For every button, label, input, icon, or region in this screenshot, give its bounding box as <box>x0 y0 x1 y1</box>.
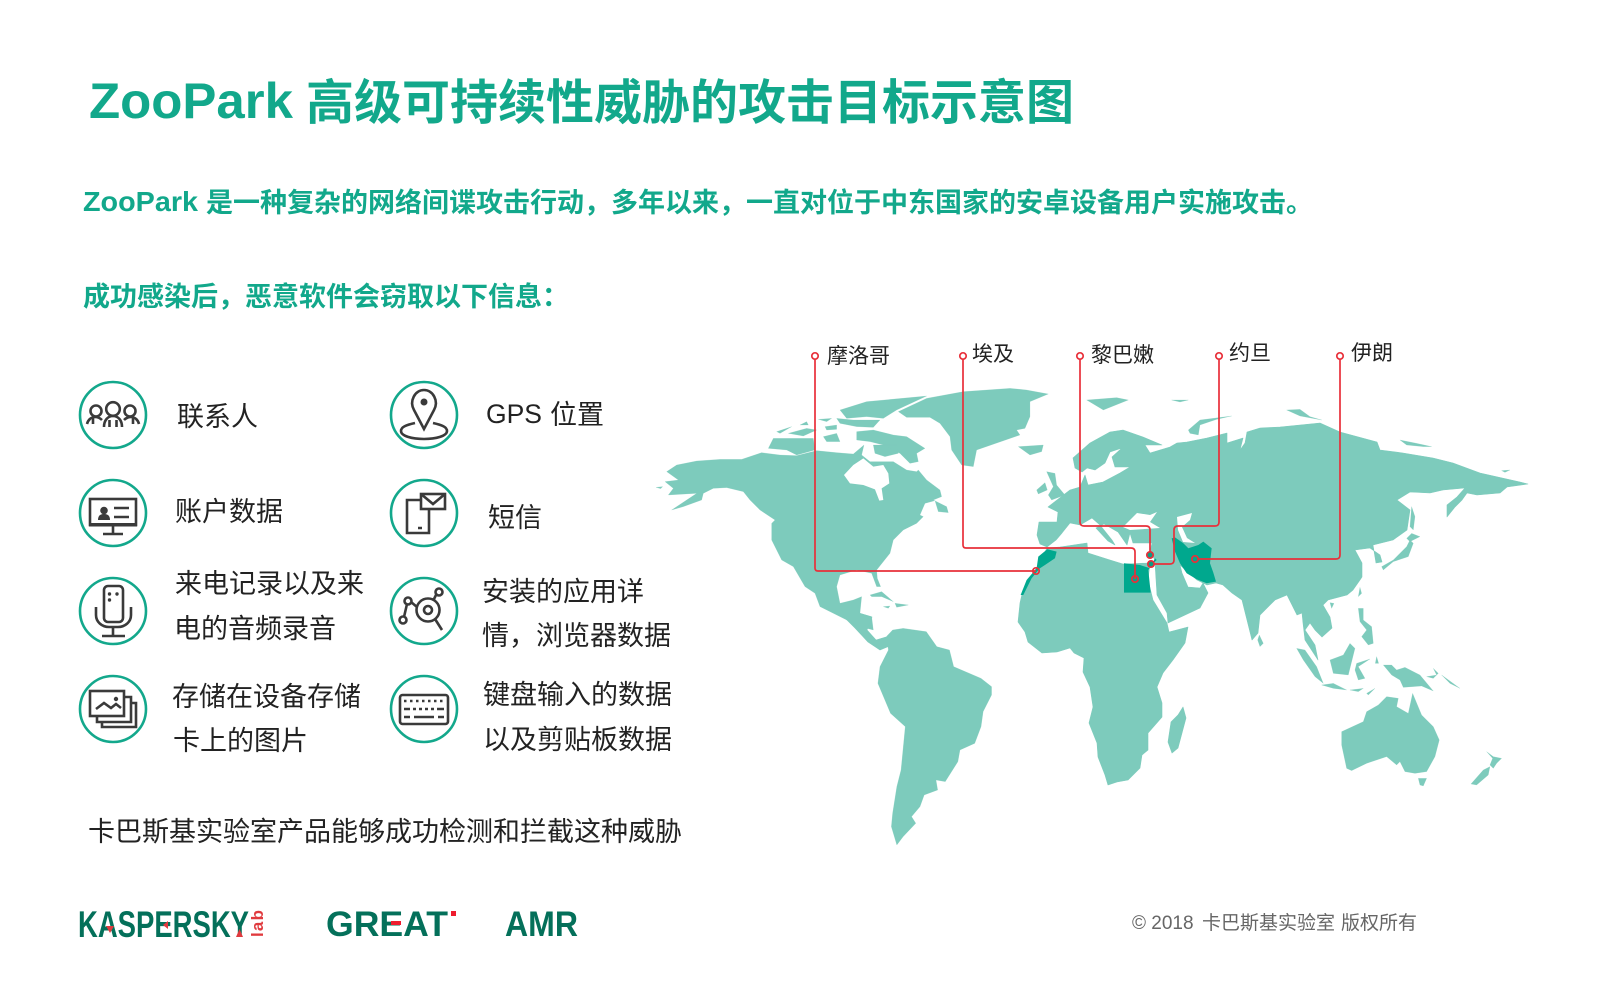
connector: Jordan <box>1148 342 1271 567</box>
connector: Morocco: 摩洛哥 <box>827 345 890 368</box>
icon: app details <box>391 578 457 644</box>
title: 高级可持续性威胁的攻击目标示意图 <box>306 77 1074 130</box>
label: app details: 情，浏览器数据 <box>482 621 671 651</box>
logo: GREAT: GREAT <box>326 905 448 944</box>
Caspian Sea <box>1177 513 1195 543</box>
label: call recording <box>174 569 364 644</box>
Tasmania and New Zealand <box>1418 752 1502 786</box>
Greenland <box>898 388 1048 467</box>
connector: Egypt <box>960 343 1138 582</box>
title: ZooPark <box>89 73 293 129</box>
logo: Kaspersky Lab: lab <box>248 910 267 937</box>
icon: stored photos <box>80 676 146 742</box>
icon: SMS <box>391 480 457 546</box>
North America <box>656 388 1065 630</box>
Madagascar <box>1168 707 1186 753</box>
icon: GPS location <box>391 382 457 448</box>
label: keyboard <box>483 680 672 755</box>
connector: Egypt: 埃及 <box>972 343 1014 366</box>
label: contacts: 联系人 <box>177 402 258 432</box>
label: SMS: 短信 <box>488 503 542 533</box>
connector: Iran <box>1192 342 1393 562</box>
connector: Lebanon <box>1077 344 1154 558</box>
label: app details: 安装的应用详 <box>482 577 644 607</box>
label: GPS: 位置 <box>550 400 604 430</box>
copyright <box>1132 912 1417 934</box>
Cuba, Hispaniola <box>870 592 908 608</box>
label: stored photos: 存储在设备存储 <box>172 682 361 712</box>
connector: Morocco <box>812 345 1039 574</box>
logo: Kaspersky Lab: KASPERSKY <box>78 904 249 945</box>
icon: keyboard <box>391 676 457 742</box>
highlight: Morocco <box>1021 549 1057 595</box>
icon: contacts <box>80 382 146 448</box>
subtitle: 是一种复杂的网络间谍攻击行动，多年以来，一直对位于中东国家的安卓设备用户实施攻击。 <box>206 187 1313 218</box>
label: keyboard: 以及剪贴板数据 <box>483 725 672 755</box>
Canadian Arctic islands <box>768 396 927 463</box>
label: stored photos <box>172 682 361 756</box>
highlight: Iran <box>1172 537 1216 583</box>
label: keyboard: 键盘输入的数据 <box>483 680 672 710</box>
highlight: Egypt <box>1124 558 1157 593</box>
copyright: 卡巴斯基实验室 <box>1202 912 1335 934</box>
label: call recording: 电的音频录音 <box>174 614 336 644</box>
Central America <box>840 598 892 650</box>
label: app details <box>482 577 671 651</box>
label: GPS <box>486 399 604 430</box>
Africa <box>1018 543 1188 785</box>
protection statement: 卡巴斯基实验室产品能够成功检测和拦截这种威胁 <box>88 817 682 847</box>
section heading: 成功感染后，恶意软件会窃取以下信息： <box>83 281 569 312</box>
Southeast Asia and Oceania <box>1258 587 1502 786</box>
copyright: 版权所有 <box>1341 912 1417 934</box>
label: account data: 账户数据 <box>175 497 283 527</box>
label: GPS: GPS <box>486 399 542 429</box>
world map <box>656 388 1528 845</box>
copyright: © 2018 <box>1132 913 1194 934</box>
Eurasia <box>1037 423 1528 660</box>
logo: AMR: AMR <box>505 905 578 944</box>
icon: call recording <box>80 578 146 644</box>
label: stored photos: 卡上的图片 <box>173 726 308 756</box>
Black Sea <box>1123 512 1160 530</box>
label: call recording: 来电记录以及来 <box>175 569 364 599</box>
Hudson Bay <box>844 458 889 501</box>
connector: Lebanon: 黎巴嫩 <box>1091 344 1154 367</box>
icon: account data <box>80 480 146 546</box>
subtitle: ZooPark <box>83 186 198 217</box>
connector: Iran: 伊朗 <box>1351 342 1393 365</box>
South America <box>878 628 992 845</box>
connector: Jordan: 约旦 <box>1229 342 1271 365</box>
Iceland, UK, Ireland <box>1018 445 1065 500</box>
Arctic and Pacific Asian islands <box>1087 398 1510 570</box>
Australia <box>1342 693 1439 773</box>
